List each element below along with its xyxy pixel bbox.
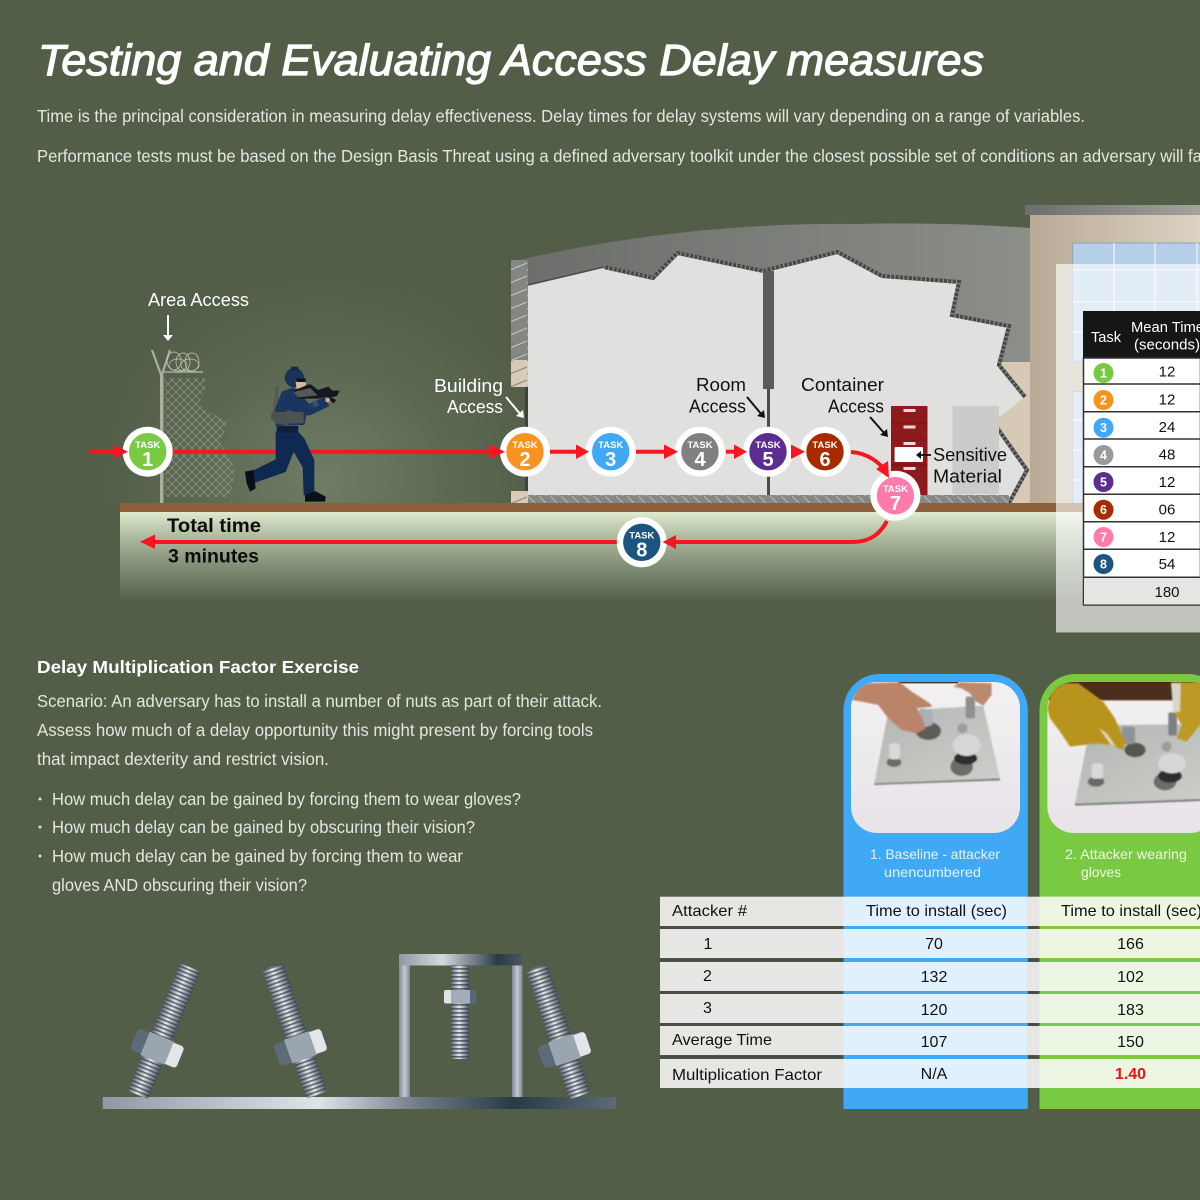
- bolt 3: [444, 965, 476, 1059]
- task 1 marker: TASK: [135, 440, 160, 451]
- gloves column cells: [1040, 897, 1200, 1088]
- baseline values: [866, 903, 1007, 1083]
- scenario text: [37, 691, 602, 769]
- row 3: [1094, 418, 1175, 438]
- illustration: nuts and bolts on plate: [103, 954, 616, 1109]
- label: container access: [801, 374, 888, 437]
- task 4 marker: TASK: [687, 440, 713, 451]
- label: building access: Access: [447, 396, 503, 417]
- row labels: [672, 903, 823, 1084]
- bolt 1: [115, 958, 213, 1104]
- photo: bare hands fitting nuts: [851, 680, 1020, 833]
- row 6: 06: [1159, 502, 1175, 518]
- row 6: [1094, 500, 1175, 520]
- bolt 2: [249, 958, 341, 1103]
- row labels: Attacker #: [672, 903, 747, 920]
- label: sensitive material: Sensitive: [933, 444, 1007, 465]
- row 7: [1094, 527, 1175, 547]
- row labels: 2: [703, 968, 712, 985]
- caption: baseline: 1. Baseline - attacker: [870, 846, 1000, 862]
- task 8 marker: TASK: [629, 530, 655, 542]
- row labels: Multiplication Factor: [672, 1067, 823, 1084]
- table header: Task: [1091, 330, 1122, 346]
- row 6: 6: [1100, 503, 1107, 517]
- label: container access: Container: [801, 374, 884, 395]
- floor slab: [528, 495, 1009, 504]
- roof: [511, 224, 1030, 362]
- row backgrounds: [660, 897, 1200, 1088]
- storage box: [952, 406, 999, 494]
- caption: gloves: gloves: [1081, 864, 1121, 880]
- task 5 marker: [743, 427, 793, 477]
- intro text: Time is the principal consideration in measuring delay effectiveness. Delay times for delay systems will vary depending on a range of variables.: [37, 106, 1085, 126]
- row 1: 12: [1159, 364, 1175, 380]
- bullet list: [38, 789, 521, 895]
- interior wall: [763, 271, 774, 495]
- baseline values: 132: [921, 969, 947, 986]
- row labels: 1: [704, 936, 712, 953]
- row 1: 1: [1100, 366, 1107, 380]
- row 2: [1094, 390, 1175, 410]
- bullet list: gloves AND obscuring their vision?: [52, 875, 307, 895]
- table body: [1084, 358, 1200, 605]
- row 3: 24: [1159, 419, 1175, 436]
- task 8 marker: [617, 517, 667, 567]
- row 4: 4: [1100, 448, 1107, 462]
- task 4 marker: 4: [694, 449, 706, 471]
- antenna pack: [272, 386, 279, 415]
- task 7 marker: 7: [890, 493, 901, 515]
- row 1: [1094, 363, 1175, 383]
- bullet list: How much delay can be gained by forcing them to wear gloves?: [52, 789, 521, 809]
- label: room access: Access: [689, 396, 746, 417]
- boots: [245, 470, 326, 502]
- caption: baseline: unencumbered: [884, 864, 981, 880]
- task 7 marker: [870, 471, 920, 521]
- exercise heading: Delay Multiplication Factor Exercise: [37, 657, 359, 677]
- head: [285, 368, 304, 387]
- right building: [1025, 205, 1200, 505]
- gloves values: 102: [1117, 969, 1144, 986]
- total time label: Total time: [167, 516, 261, 537]
- total row: 180: [1154, 584, 1180, 601]
- base plate: [103, 1097, 616, 1109]
- task 1 marker: 1: [142, 449, 153, 471]
- task 4 marker: [675, 427, 725, 477]
- label: room access: Room: [696, 374, 746, 395]
- photo: gloved hands fitting nuts: [1047, 678, 1200, 833]
- row 5: 12: [1159, 474, 1175, 491]
- task time table: [1083, 311, 1200, 605]
- icon: perimeter fence: [152, 350, 235, 503]
- label: building access: Building: [434, 375, 503, 396]
- scenario text: Scenario: An adversary has to install a number of nuts as part of their attack.: [37, 691, 602, 711]
- task 2 marker: 2: [519, 449, 531, 471]
- caption: gloves: 2. Attacker wearing: [1065, 846, 1187, 862]
- row 4: 48: [1159, 446, 1175, 464]
- label: area access: [148, 289, 249, 341]
- row 8: 54: [1159, 556, 1175, 573]
- left wall: [511, 260, 528, 504]
- row 8: 8: [1100, 558, 1107, 572]
- baseline values: 107: [921, 1034, 947, 1051]
- task 6 marker: 6: [819, 449, 831, 471]
- route arrowheads: [113, 444, 889, 549]
- row 5: [1094, 472, 1175, 492]
- results table: [660, 897, 1200, 1088]
- task 7 marker: TASK: [883, 484, 908, 495]
- row 4: [1094, 445, 1175, 465]
- interior floor plan: [528, 252, 1027, 503]
- label: sensitive material: [916, 444, 1007, 487]
- task 2 marker: TASK: [512, 440, 538, 451]
- row labels: 3: [703, 1000, 712, 1017]
- row 3: 3: [1100, 421, 1107, 435]
- icon: attacker figure: [245, 367, 340, 502]
- row 5: 5: [1100, 476, 1107, 490]
- task 6 marker: TASK: [812, 440, 838, 451]
- scenario text: Assess how much of a delay opportunity this might present by forcing tools: [37, 720, 593, 740]
- row separators: [660, 926, 1200, 1058]
- translucent panel behind task table: [1056, 264, 1200, 632]
- scenario text: that impact dexterity and restrict vision.: [37, 749, 329, 769]
- table header: [1083, 311, 1200, 358]
- bullet list: How much delay can be gained by forcing them to wear: [52, 846, 463, 866]
- building cross-section: [511, 224, 1032, 505]
- panel: baseline column: [844, 674, 1028, 1109]
- background glow: [176, 344, 474, 503]
- panel: gloves column: [1040, 674, 1200, 1109]
- row 7: 12: [1159, 529, 1175, 546]
- task 5 marker: 5: [762, 449, 774, 471]
- label: room access: [689, 374, 765, 418]
- total time label: [167, 516, 261, 568]
- red route lines: [90, 452, 887, 542]
- bullet list: How much delay can be gained by obscuring their vision?: [52, 817, 475, 837]
- task 3 marker: 3: [605, 449, 616, 471]
- baseline values: N/A: [921, 1066, 948, 1083]
- filing cabinet: [891, 406, 928, 495]
- task 6 marker: [800, 427, 850, 477]
- legs: [252, 432, 314, 495]
- row labels: Average Time: [672, 1032, 772, 1049]
- gloves values: 1.40: [1115, 1066, 1146, 1083]
- caption: baseline: [870, 846, 1000, 880]
- task 1 marker: [123, 427, 173, 477]
- task 3 marker: [586, 427, 636, 477]
- row 2: 12: [1159, 392, 1175, 408]
- baseline values: Time to install (sec): [866, 903, 1007, 920]
- ground: [120, 503, 1200, 603]
- row 2: 2: [1100, 394, 1107, 408]
- torso: [275, 387, 309, 426]
- row 8: [1094, 554, 1175, 574]
- baseline values: 70: [925, 936, 943, 953]
- windows: [1073, 243, 1200, 504]
- title: Testing and Evaluating Access Delay measures: [38, 36, 984, 85]
- table header: (seconds): [1134, 338, 1200, 354]
- row 7: 7: [1100, 530, 1107, 544]
- caption: gloves: [1065, 846, 1187, 880]
- frame: [399, 954, 522, 1097]
- bolt 4: [513, 959, 604, 1104]
- tan wall behind interior: [980, 362, 1032, 505]
- task 2 marker: [500, 427, 550, 477]
- gloves values: 183: [1117, 1002, 1144, 1019]
- arm: [293, 397, 327, 410]
- total time label: 3 minutes: [168, 546, 259, 568]
- gloves values: Time to install (sec): [1061, 903, 1200, 920]
- gloves values: 166: [1117, 936, 1144, 953]
- gloves values: [1061, 903, 1200, 1083]
- rifle: [293, 384, 340, 403]
- task 3 marker: TASK: [598, 440, 623, 451]
- outer wall hatch: [528, 252, 1027, 503]
- task 8 marker: 8: [636, 540, 647, 562]
- label: area access: Area Access: [148, 289, 249, 310]
- label: sensitive material: Material: [933, 466, 1002, 487]
- gear: [271, 410, 304, 425]
- gloves values: 150: [1117, 1034, 1144, 1051]
- label: container access: Access: [828, 396, 884, 417]
- label: building access: [434, 375, 524, 418]
- intro text: [37, 106, 1200, 166]
- baseline column cells: [844, 897, 1028, 1088]
- baseline values: 120: [921, 1002, 947, 1019]
- task 5 marker: TASK: [755, 440, 781, 451]
